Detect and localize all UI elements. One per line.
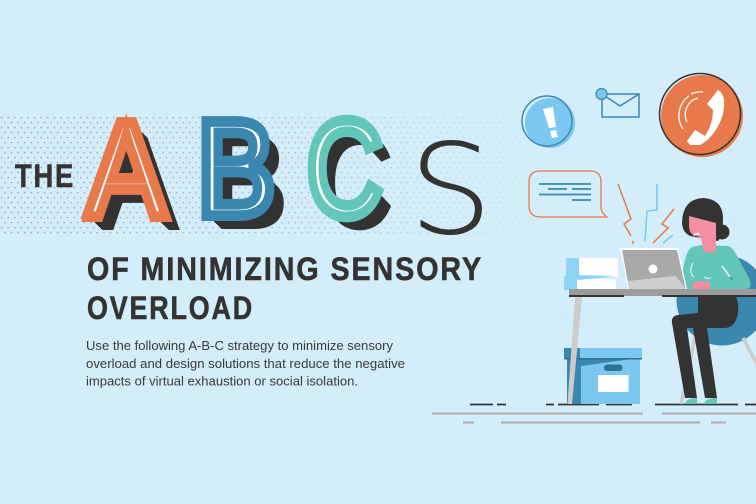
title word: THE: THE bbox=[15, 158, 75, 194]
laptop bbox=[620, 248, 687, 289]
subtitle heading bbox=[87, 251, 483, 326]
mouth bbox=[693, 233, 700, 236]
icon: ringing phone bbox=[660, 74, 743, 157]
intro paragraph: Use the following A-B-C strategy to minimize sensory bbox=[86, 338, 393, 353]
subtitle heading: OF MINIMIZING SENSORY bbox=[87, 251, 483, 287]
desk leg bbox=[568, 297, 582, 404]
title letter: C: C bbox=[307, 93, 382, 244]
ground lines bbox=[432, 404, 756, 422]
icon: speech bubble bbox=[529, 171, 607, 217]
bun and hair bbox=[714, 224, 730, 240]
chair bbox=[676, 254, 756, 404]
title letter: B: B bbox=[197, 93, 275, 244]
face and neck bbox=[689, 216, 716, 253]
person bbox=[672, 198, 751, 404]
title letter: C: C bbox=[307, 93, 382, 244]
icon: envelope bbox=[596, 88, 639, 117]
desk top bbox=[569, 289, 756, 297]
sweater bbox=[683, 245, 751, 289]
title letter: S: S bbox=[409, 118, 492, 263]
hand bbox=[692, 281, 710, 290]
sweater folds bbox=[691, 263, 711, 278]
title letter: A: A bbox=[87, 94, 165, 245]
intro paragraph: overload and design solutions that reduce the negative bbox=[86, 356, 405, 371]
halftone dot band bbox=[0, 116, 517, 234]
intro paragraph: impacts of virtual exhaustion or social isolation. bbox=[86, 374, 358, 388]
icon: exclamation alert bbox=[522, 96, 575, 148]
shoes bbox=[685, 398, 717, 404]
intro paragraph bbox=[86, 338, 405, 388]
storage box bbox=[564, 348, 642, 404]
legs bbox=[672, 297, 738, 398]
title letter: B: B bbox=[197, 93, 275, 244]
icon: stress lightning bolts bbox=[618, 184, 674, 244]
title letter: A: A bbox=[87, 94, 165, 245]
subtitle heading: OVERLOAD bbox=[87, 290, 254, 326]
stack of papers and binders bbox=[564, 258, 618, 290]
